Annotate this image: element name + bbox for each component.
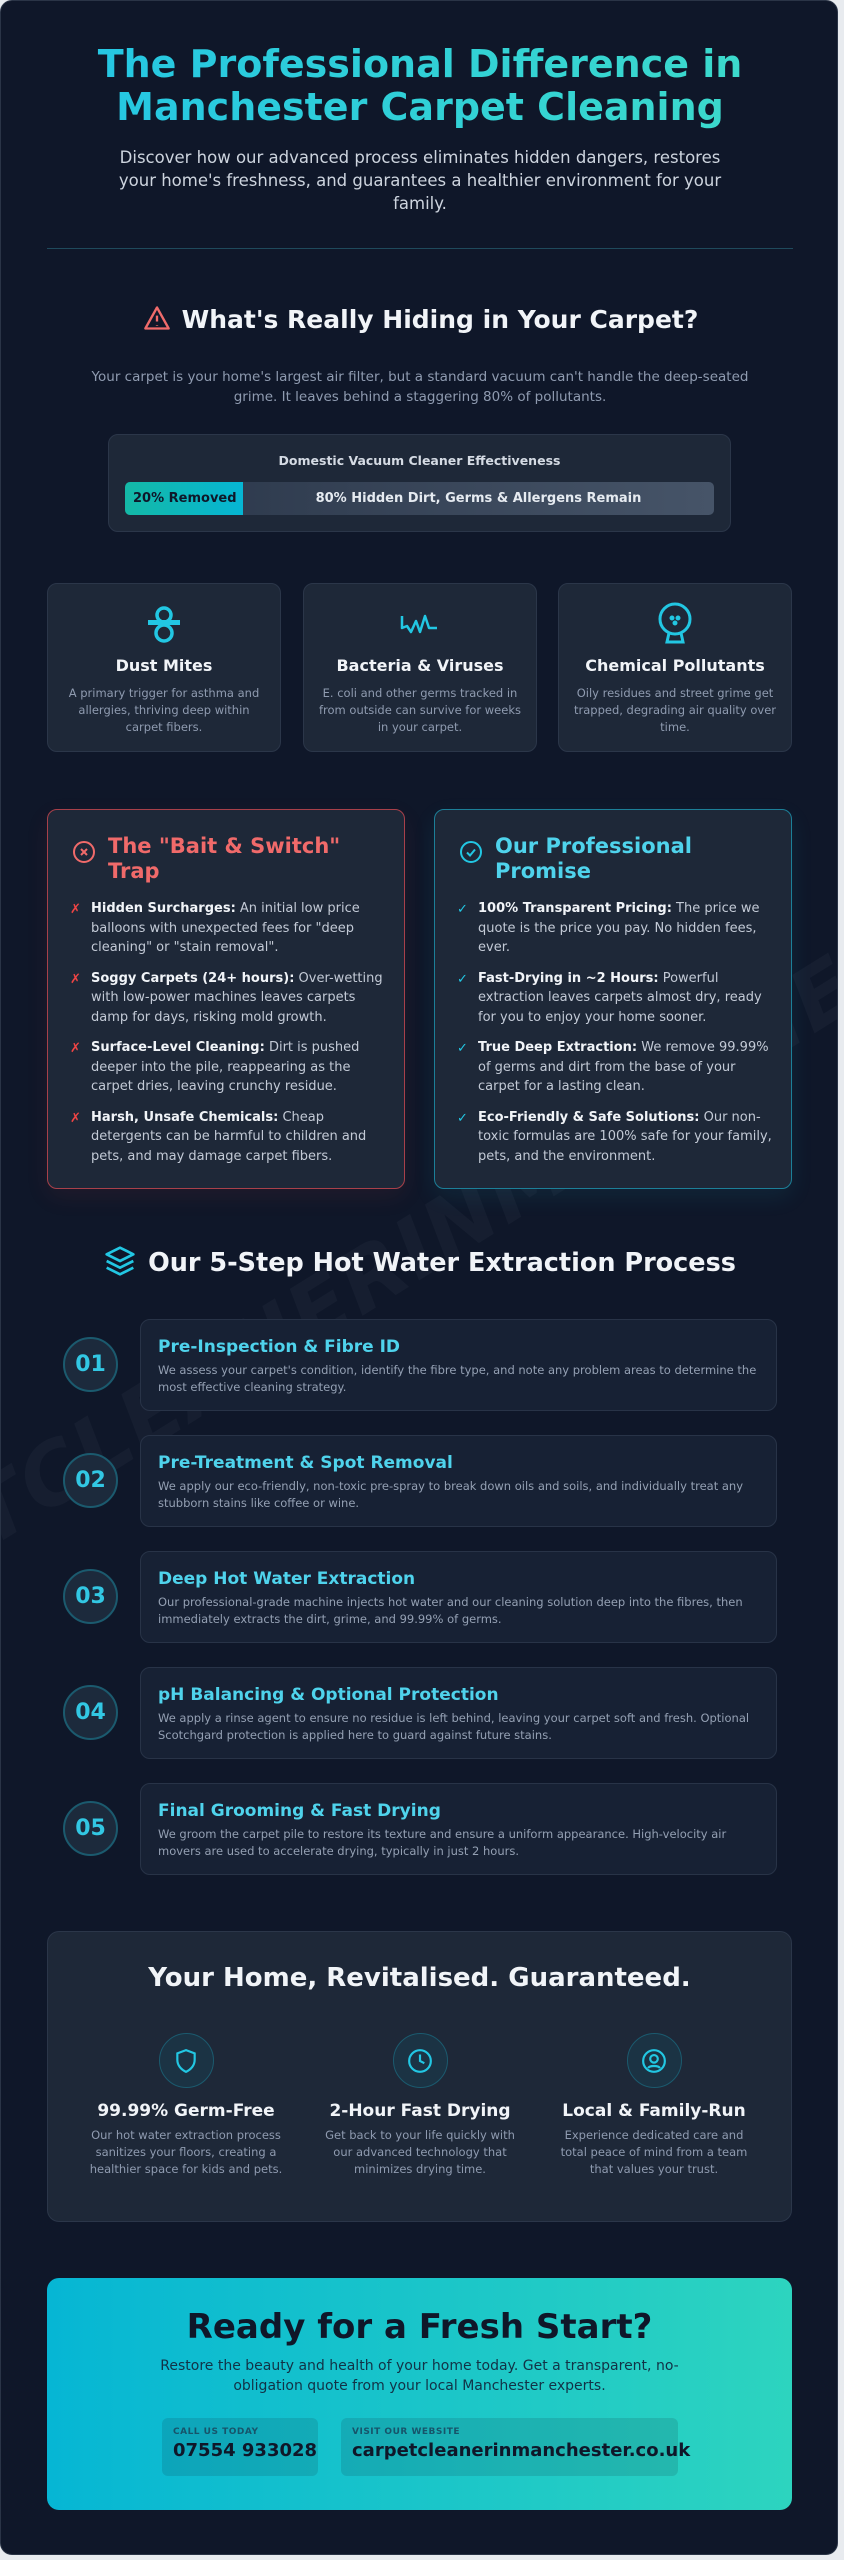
intro paragraph: Your carpet is your home's largest air filter, but a standard vacuum can't handle the deep-seated grime. It leaves behind a staggering 80% of pollutants.	[92, 369, 748, 405]
panel: dust mites	[47, 583, 281, 752]
panel: dust mites: Dust Mites	[116, 656, 212, 675]
panel: call to action	[47, 2278, 792, 2510]
icon: user circle	[626, 2033, 682, 2088]
step 3	[63, 1551, 777, 1643]
contact: website: VISIT OUR WEBSITE	[352, 2427, 460, 2437]
panel: professional promise	[434, 809, 792, 1189]
icon: warning	[144, 306, 170, 330]
section heading: hiding: What's Really Hiding in Your Carpet?	[182, 305, 698, 334]
list: promise items: ✓	[457, 972, 468, 986]
feature: local family-run	[560, 2033, 747, 2176]
icon: pulse	[400, 614, 437, 634]
icon: dust mite	[148, 606, 180, 643]
icon: layers	[105, 1246, 135, 1276]
feature: germ-free: Our hot water extraction process sanitizes your floors, creating a healthier space for kids and pets.	[90, 2128, 282, 2176]
step 5: Final Grooming & Fast Drying	[158, 1801, 441, 1821]
step 3: Our professional-grade machine injects hot water and our cleaning solution deep into the fibres, then immediately extracts the dirt, grime, and 99.99% of germs.	[158, 1595, 743, 1626]
list: promise items: ✓	[457, 902, 468, 917]
panel: dust mites: A primary trigger for asthma and allergies, thriving deep within carpet fibers.	[69, 686, 259, 734]
contact: phone: 07554 933028	[173, 2440, 317, 2461]
step 4: We apply a rinse agent to ensure no residue is left behind, leaving your carpet soft and fresh. Optional Scotchgard protection is applied here to guard against future stains.	[158, 1711, 749, 1742]
panel: bait and switch trap	[47, 809, 405, 1189]
heading: guarantee: Your Home, Revitalised. Guaranteed.	[148, 1963, 691, 1993]
feature: germ-free: 99.99% Germ-Free	[97, 2101, 275, 2121]
panel: bacteria: Bacteria & Viruses	[336, 656, 504, 675]
step 1: We assess your carpet's condition, identify the fibre type, and note any problem areas to determine the most effective cleaning strategy.	[158, 1363, 756, 1394]
step 3: 03	[75, 1584, 106, 1609]
cta text: Restore the beauty and health of your home today. Get a transparent, no-obligation quote from your local Manchester experts.	[160, 2358, 679, 2394]
list: trap items: Harsh, Unsafe Chemicals: Cheap detergents can be harmful to children and pets, and may damage carpet fibers.	[91, 1110, 366, 1164]
panel: chemical pollutants: Oily residues and street grime get trapped, degrading air quality over time.	[574, 686, 776, 734]
panel: bacteria	[303, 583, 537, 752]
panel: guarantee	[47, 1931, 792, 2222]
step 4: pH Balancing & Optional Protection	[158, 1685, 499, 1705]
feature: fast drying	[325, 2033, 515, 2176]
heading: trap: The "Bait & Switch" Trap	[108, 834, 340, 883]
feature: local family-run: Experience dedicated care and total peace of mind from a team that values your trust.	[561, 2128, 747, 2176]
list: trap items: Soggy Carpets (24+ hours): Over-wetting with low-power machines leaves carpets damp for days, risking mold growth.	[91, 970, 383, 1024]
list: promise items: 100% Transparent Pricing: The price we quote is the price you pay. No hidden fees, ever.	[478, 901, 759, 955]
icon: shield	[158, 2033, 214, 2088]
list: promise items: Eco-Friendly & Safe Solutions: Our non-toxic formulas are 100% safe for your family, pets, and the environment.	[478, 1110, 772, 1164]
bar chart: vacuum effectiveness	[108, 434, 731, 532]
step 4	[63, 1667, 777, 1759]
heading: cta: Ready for a Fresh Start?	[187, 2307, 652, 2347]
list: promise items: True Deep Extraction: We remove 99.99% of germs and dirt from the base of your carpet for a lasting clean.	[478, 1040, 769, 1094]
contact: website: carpetcleanerinmanchester.co.uk	[352, 2440, 690, 2461]
feature: fast drying: Get back to your life quickly with our advanced technology that minimizes drying time.	[325, 2128, 515, 2176]
list: trap items: Hidden Surcharges: An initial low price balloons with unexpected fees for "deep cleaning" or "stain removal".	[91, 901, 360, 955]
title	[1, 43, 839, 129]
bar chart: vacuum effectiveness: 80% Hidden Dirt, Germs & Allergens Remain	[316, 491, 641, 506]
list: promise items: Fast-Drying in ~2 Hours: Powerful extraction leaves carpets almost dry, ready for you to enjoy your home sooner.	[478, 970, 762, 1024]
icon: head	[658, 602, 692, 644]
feature: local family-run: Local & Family-Run	[562, 2101, 746, 2121]
panel: chemical pollutants: Chemical Pollutants	[585, 656, 765, 675]
bar chart: vacuum effectiveness: Domestic Vacuum Cleaner Effectiveness	[279, 453, 560, 468]
icon: clock	[392, 2033, 448, 2088]
step 2	[63, 1435, 777, 1527]
subtitle: Discover how our advanced process eliminates hidden dangers, restores your home's freshness, and guarantees a healthier environment for your family.	[119, 148, 721, 213]
step 3: Deep Hot Water Extraction	[158, 1569, 415, 1589]
section heading: process: Our 5-Step Hot Water Extraction Process	[148, 1248, 736, 1278]
list: trap items: Surface-Level Cleaning: Dirt is pushed deeper into the pile, reappearing as the carpet dries, leaving crunchy residue.	[91, 1040, 359, 1094]
title: Manchester Carpet Cleaning	[116, 85, 724, 129]
icon: check circle	[460, 841, 482, 863]
list: trap items: ✗	[70, 1110, 81, 1126]
step 5: 05	[75, 1816, 106, 1841]
list: promise items: ✓	[457, 1041, 468, 1056]
list: trap items	[70, 901, 383, 1164]
list: trap items: ✗	[70, 972, 81, 986]
contact: website	[341, 2418, 678, 2476]
step 2: Pre-Treatment & Spot Removal	[158, 1453, 453, 1473]
list: promise items	[457, 901, 772, 1164]
icon: x circle	[73, 841, 95, 863]
title: The Professional Difference in	[98, 42, 742, 86]
list: promise items: ✓	[457, 1110, 468, 1126]
step 4: 04	[75, 1700, 106, 1725]
step 1	[63, 1319, 777, 1411]
contact: phone: CALL US TODAY	[173, 2427, 258, 2437]
step 1: 01	[75, 1352, 106, 1377]
feature: germ-free	[90, 2033, 282, 2176]
list: trap items: ✗	[70, 902, 81, 917]
step 2: 02	[75, 1468, 106, 1493]
panel: bacteria: E. coli and other germs tracked in from outside can survive for weeks in your carpet.	[319, 686, 521, 734]
contact: phone	[162, 2418, 318, 2476]
step 5: We groom the carpet pile to restore its texture and ensure a uniform appearance. High-velocity air movers are used to accelerate drying, typically in just 2 hours.	[158, 1827, 726, 1858]
bar chart: vacuum effectiveness: 20% Removed	[133, 491, 237, 506]
panel: chemical pollutants	[558, 583, 792, 752]
list: trap items: ✗	[70, 1041, 81, 1056]
feature: fast drying: 2-Hour Fast Drying	[329, 2101, 511, 2121]
step 2: We apply our eco-friendly, non-toxic pre-spray to break down oils and soils, and individually treat any stubborn stains like coffee or wine.	[158, 1479, 743, 1510]
heading: promise: Our Professional Promise	[495, 834, 692, 883]
step 5	[63, 1783, 777, 1875]
step 1: Pre-Inspection & Fibre ID	[158, 1337, 400, 1357]
